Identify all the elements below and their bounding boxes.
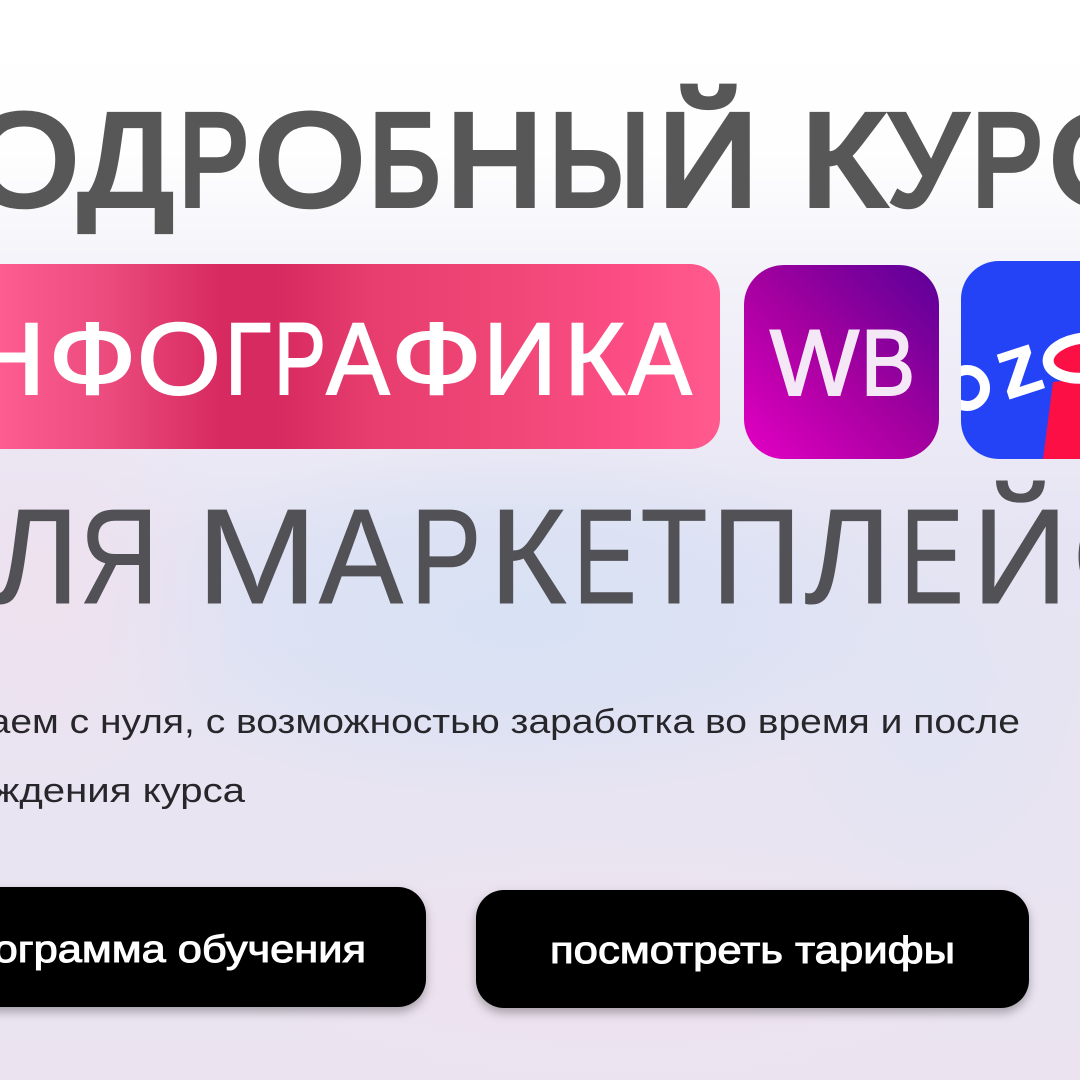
title line 3: Й: [972, 481, 1068, 632]
highlighted pill: инфографика: Ф: [48, 302, 136, 416]
icon: WB logo: B: [861, 310, 915, 415]
title line 1: К: [801, 86, 885, 233]
title line 1: Ы: [549, 86, 650, 233]
highlighted pill: инфографика: А: [326, 302, 390, 416]
button: программа обучения: [0, 887, 426, 1007]
title line 3: Я: [80, 481, 158, 632]
description text: [0, 703, 1020, 810]
highlighted pill: инфографика: Р: [274, 302, 326, 416]
highlighted pill: инфографика: Ф: [391, 302, 482, 416]
button: посмотреть тарифы: [476, 890, 1029, 1008]
title line 3: Е: [900, 481, 964, 632]
title line 3: М: [196, 481, 318, 632]
highlighted pill: инфографика: [0, 264, 720, 449]
title line 3: Л: [804, 481, 892, 632]
highlighted pill: инфографика: К: [564, 302, 625, 416]
highlighted pill: инфографика: Г: [225, 302, 271, 416]
title line 3: К: [490, 481, 566, 632]
highlighted pill: инфографика: А: [628, 302, 692, 416]
title line 3: Е: [574, 481, 636, 632]
title line 1: Н: [446, 86, 542, 233]
icon: WB logo: [744, 265, 939, 459]
button: посмотреть тарифы: посмотреть тарифы: [550, 930, 955, 972]
icon: Ozon logo: [949, 261, 1080, 459]
title line 1: У: [888, 86, 967, 233]
icon: Ozon logo: z: [981, 311, 1054, 419]
title line 1: Р: [179, 86, 249, 233]
icon: WB logo: W: [770, 310, 859, 415]
title line 3: П: [712, 481, 802, 632]
title line 1: О: [256, 86, 364, 233]
title line 1: Р: [972, 86, 1043, 233]
title line 3: Т: [640, 481, 708, 632]
highlighted pill: инфографика: О: [137, 302, 221, 416]
title line 1: Й: [658, 85, 758, 233]
title line 1: Б: [369, 86, 441, 233]
title line 1: Д: [80, 86, 172, 233]
title line 3: Р: [410, 481, 482, 632]
highlighted pill: инфографика: И: [483, 302, 557, 416]
title line 3: А: [319, 481, 403, 632]
